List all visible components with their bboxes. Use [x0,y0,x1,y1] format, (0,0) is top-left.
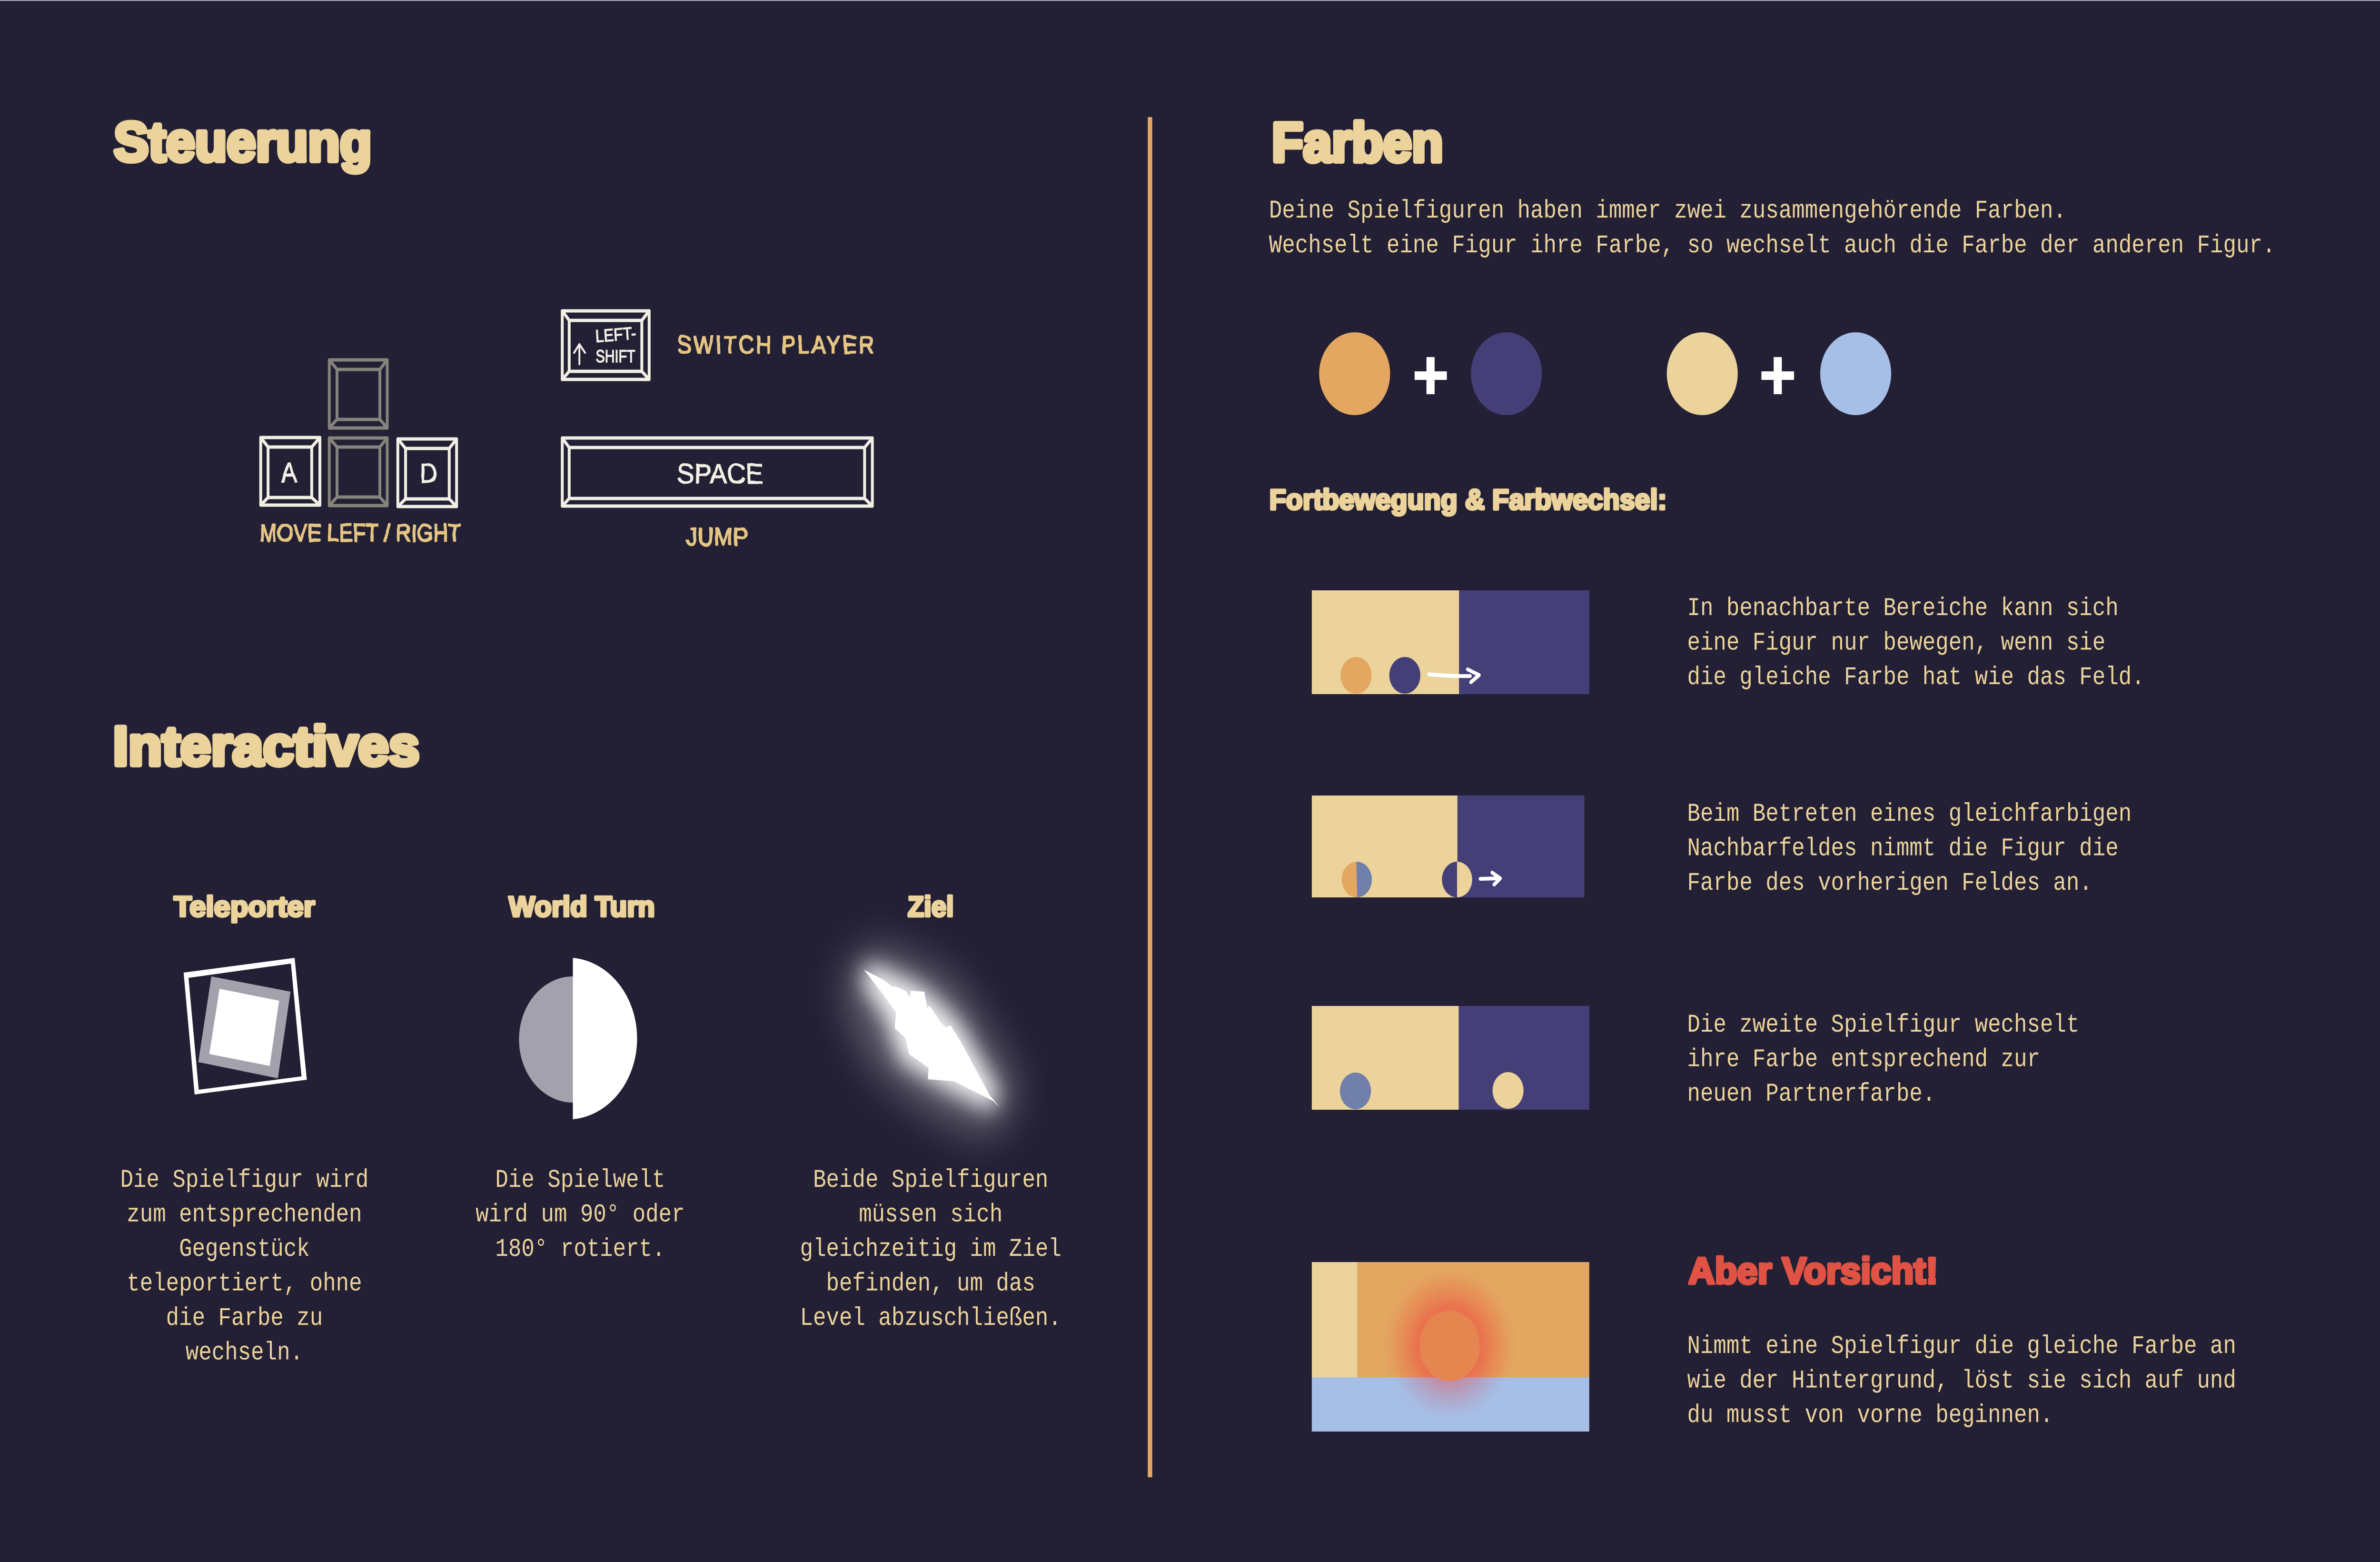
diagram: step 1 move [1312,590,1589,694]
panel: WASD keys [259,360,461,547]
heading: Steuerung: Steuerung [114,111,372,173]
divider: vertical orange line [1148,117,1152,1477]
icon: up arrow [574,344,585,364]
text: ziel description: müssen sich [859,1200,1002,1229]
key text: LEFT-: LEFT- [595,324,637,347]
text: teleporter description: zum entsprechenden [127,1200,362,1229]
icon: half circles [519,958,637,1119]
text: teleporter description: wechseln. [186,1338,303,1367]
subheading: Teleporter: Teleporter [174,890,315,923]
key: S (dimmed) [329,438,387,506]
key text: SPACE: SPACE [677,458,763,489]
diagram: step 2 colour change [1312,796,1584,897]
text: ziel description: Beide Spielfiguren [813,1166,1048,1194]
text: step 2: Beim Betreten eines gleichfarbigen [1687,800,2132,828]
heading: Farben: Farben [1272,111,1443,173]
subheading: Ziel: Ziel [908,890,954,923]
heading: Interactives: Interactives [113,715,419,777]
text: step 3: ihre Farbe entsprechend zur [1687,1045,2040,1074]
key: A: A [281,457,297,488]
text: world turn description: Die Spielwelt [495,1166,665,1194]
colour pair: orange plus purple [1319,332,1542,415]
text: world turn description: 180° rotiert. [495,1235,665,1264]
text: step 1: eine Figur nur bewegen, wenn sie [1687,628,2105,657]
text: warning: Nimmt eine Spielfigur die gleiche Farbe an [1687,1332,2236,1361]
key text: SHIFT: SHIFT [596,347,635,367]
icon: teleporter [184,958,307,1094]
heading: Aber Vorsicht: Aber Vorsicht! [1688,1250,1938,1292]
key: W (dimmed) [329,360,387,428]
text: step 2: Farbe des vorherigen Feldes an. [1687,869,2092,897]
text: step 2: Nachbarfeldes nimmt die Figur die [1687,834,2119,863]
key: D [398,439,456,507]
key: left shift [562,311,649,379]
key: D: D [420,458,437,489]
diagram: step 3 partner colour [1312,1006,1589,1110]
text: step 1: In benachbarte Bereiche kann sich [1687,594,2119,623]
text: ziel description: befinden, um das [826,1269,1035,1298]
text: ziel description: gleichzeitig im Ziel [800,1235,1061,1264]
text: teleporter description: Die Spielfigur wird [120,1166,368,1194]
subheading: movement and colour change: Fortbewegung & Farbwechsel: [1269,483,1667,516]
diagram: figure dissolves [1312,1262,1589,1432]
text: step 1: die gleiche Farbe hat wie das Feld. [1687,663,2145,692]
key: space [562,438,873,506]
subheading: World Turn: World Turn [509,890,655,923]
arrow: move right [1429,669,1479,682]
icon: glowing goal [864,970,1000,1107]
label: move left/right: MOVE LEFT / RIGHT [259,519,461,547]
text: warning: wie der Hintergrund, löst sie sich auf und [1687,1366,2236,1395]
text: colours intro: Deine Spielfiguren haben immer zwei zusammengehörende Farben. [1269,197,2066,225]
panel: Teleporter [120,890,368,1367]
label: switch player: SWITCH PLAYER [677,331,874,359]
colour pair: cream plus blue [1667,332,1891,415]
panel: World Turn [476,890,685,1264]
text: warning: du musst von vorne beginnen. [1687,1401,2053,1430]
panel: space key [562,438,873,551]
panel: left shift key [562,311,874,379]
text: world turn description: wird um 90° oder [476,1200,685,1229]
text: step 3: neuen Partnerfarbe. [1687,1080,1935,1108]
label: jump: JUMP [686,523,748,551]
text: teleporter description: die Farbe zu [166,1304,323,1333]
text: colours intro: Wechselt eine Figur ihre Farbe, so wechselt auch die Farbe der anderen Figur. [1269,231,2275,260]
text: ziel description: Level abzuschließen. [800,1304,1061,1333]
text: teleporter description: teleportiert, ohne [127,1269,362,1298]
key: A [261,438,320,505]
text: teleporter description: Gegenstück [179,1235,310,1264]
panel: Ziel [800,890,1061,1333]
arrow: move right [1480,873,1500,885]
text: step 3: Die zweite Spielfigur wechselt [1687,1011,2079,1039]
